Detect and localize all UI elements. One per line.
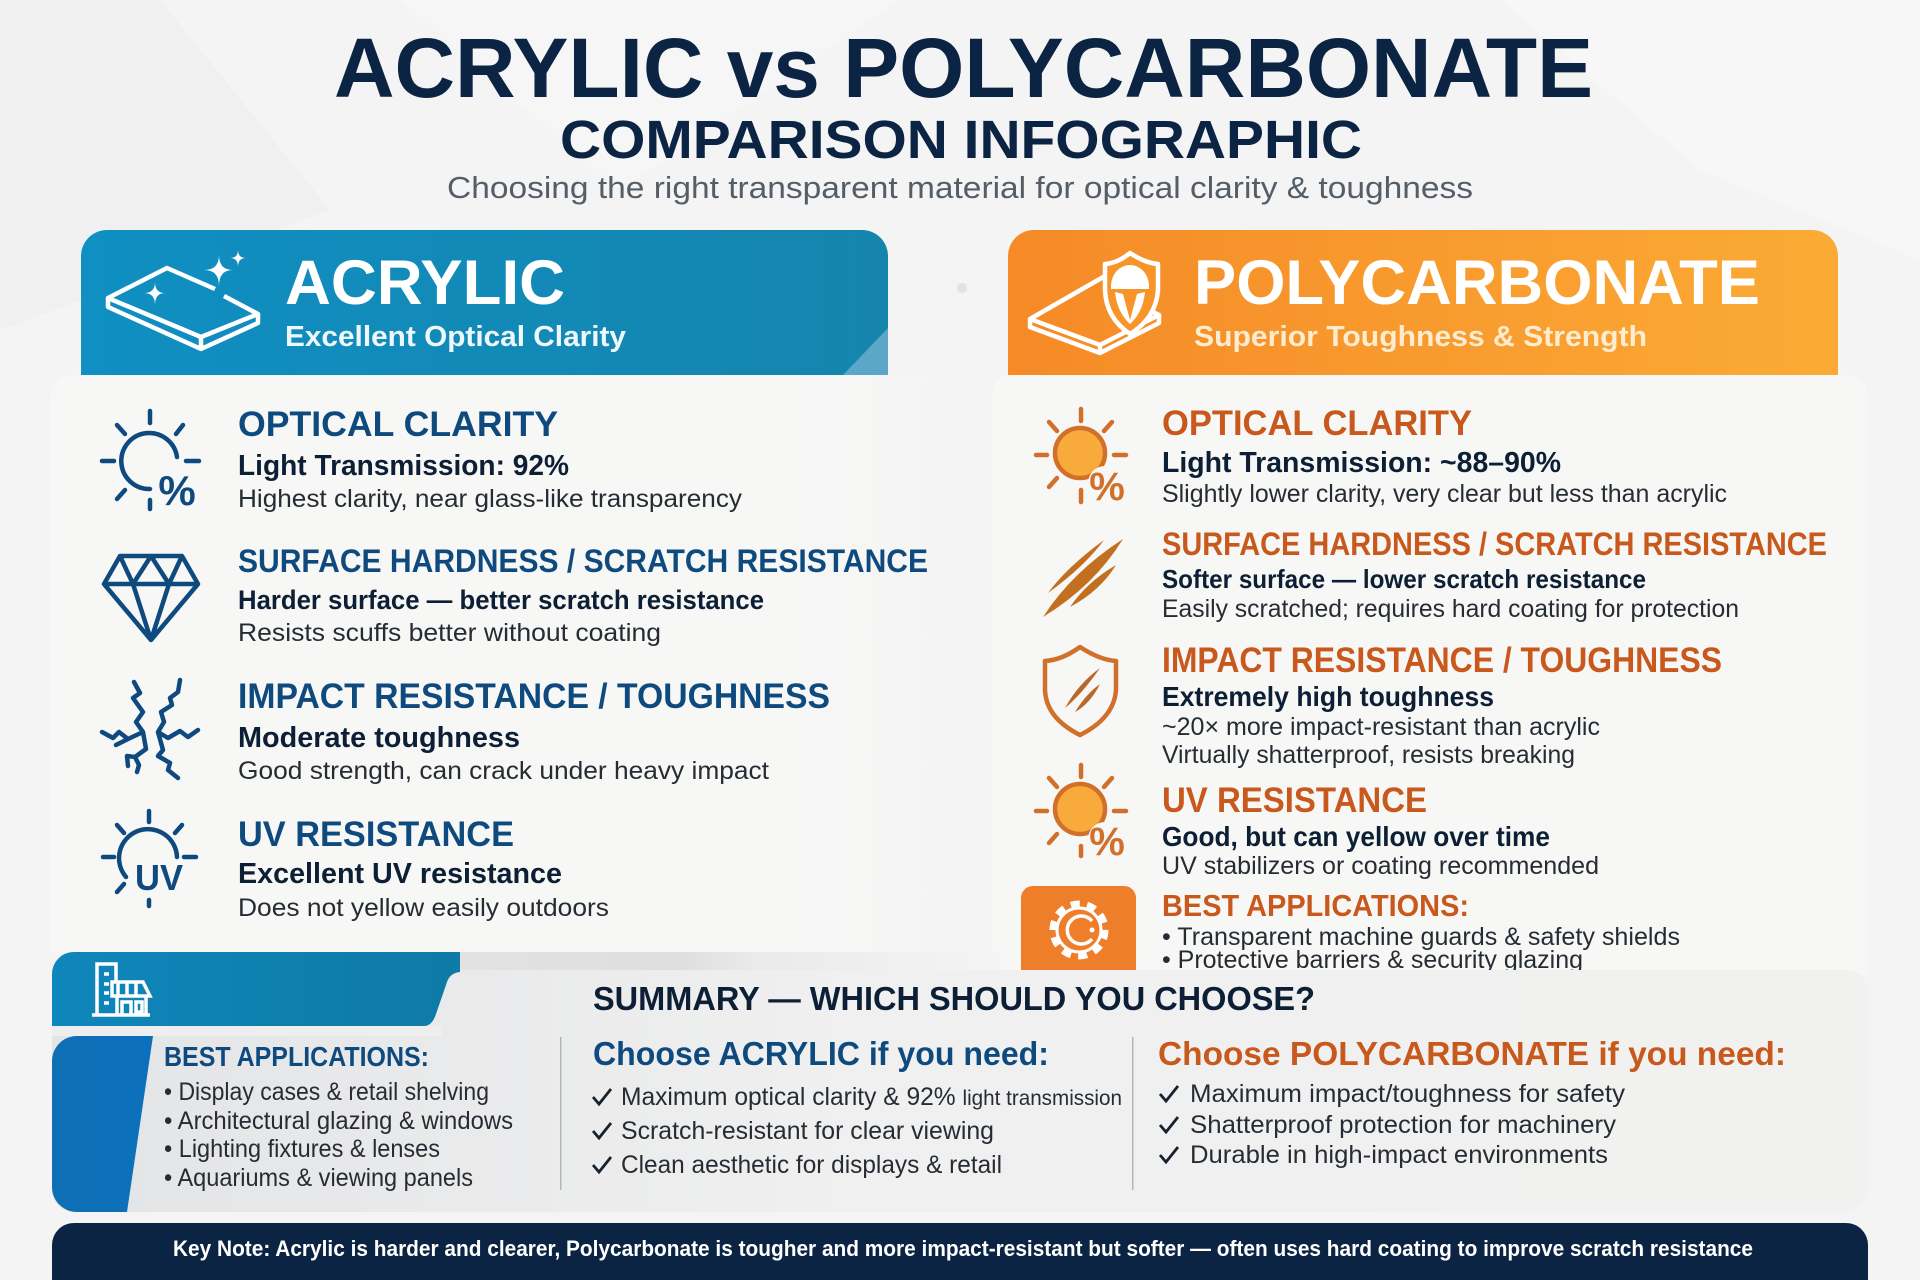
UV resistance text: UV RESISTANCE bbox=[238, 815, 514, 854]
icon: optical clarity sun bbox=[102, 411, 199, 514]
UV resistance text: Excellent UV resistance bbox=[238, 858, 562, 890]
optical clarity text: Highest clarity, near glass-like transparency bbox=[238, 485, 743, 513]
impact resistance text bbox=[238, 677, 830, 785]
choose acrylic column bbox=[593, 1035, 1122, 1179]
tagline: Choosing the right transparent material for optical clarity & toughness bbox=[447, 170, 1473, 205]
optical clarity text: OPTICAL CLARITY bbox=[1162, 404, 1472, 443]
icon: building bbox=[92, 964, 150, 1015]
impact resistance text: Extremely high toughness bbox=[1162, 681, 1494, 712]
choose acrylic column: Choose ACRYLIC if you need: bbox=[593, 1035, 1049, 1072]
impact resistance text: Good strength, can crack under heavy impact bbox=[238, 757, 769, 785]
icon: gear box bbox=[1021, 886, 1136, 975]
choose polycarbonate column: Maximum impact/toughness for safety bbox=[1190, 1080, 1626, 1108]
UV resistance text bbox=[238, 815, 609, 922]
best applications acrylic: • Aquariums & viewing panels bbox=[164, 1164, 473, 1192]
best applications polycarbonate bbox=[1162, 888, 1680, 974]
blue tab with building icon bbox=[52, 952, 460, 1026]
panel: summary bbox=[52, 952, 1868, 1212]
optical clarity text bbox=[1162, 404, 1727, 508]
surface hardness text bbox=[238, 543, 928, 647]
panel: polycarbonate properties bbox=[992, 375, 1868, 975]
best applications acrylic: • Display cases & retail shelving bbox=[164, 1078, 489, 1106]
icon: UV sun: UV bbox=[135, 857, 183, 898]
UV resistance text: UV stabilizers or coating recommended bbox=[1162, 852, 1599, 880]
impact resistance text: Virtually shatterproof, resists breaking bbox=[1162, 741, 1575, 769]
optical clarity text: Light Transmission: ~88–90% bbox=[1162, 447, 1561, 479]
icon: sheet with shield bbox=[1030, 253, 1159, 353]
surface hardness text bbox=[1162, 526, 1827, 623]
UV resistance text: Good, but can yellow over time bbox=[1162, 821, 1550, 852]
key note bar bbox=[52, 1223, 1868, 1280]
surface hardness text: Harder surface — better scratch resistance bbox=[238, 585, 764, 615]
acrylic heading: ACRYLIC bbox=[285, 248, 565, 318]
surface hardness text: SURFACE HARDNESS / SCRATCH RESISTANCE bbox=[238, 543, 928, 579]
optical clarity text bbox=[238, 405, 743, 513]
key note bar: Key Note: Acrylic is harder and clearer, Polycarbonate is tougher and more impact-resistant but softer — often uses hard coating to improve scratch resistance bbox=[173, 1236, 1753, 1261]
summary heading: SUMMARY — WHICH SHOULD YOU CHOOSE? bbox=[593, 980, 1315, 1017]
best applications polycarbonate: • Transparent machine guards & safety shields bbox=[1162, 923, 1680, 951]
optical clarity text: OPTICAL CLARITY bbox=[238, 405, 558, 444]
icon: optical clarity sun bbox=[1036, 409, 1126, 509]
UV resistance text bbox=[1162, 781, 1599, 880]
surface hardness text: SURFACE HARDNESS / SCRATCH RESISTANCE bbox=[1162, 526, 1827, 562]
optical clarity text: Slightly lower clarity, very clear but less than acrylic bbox=[1162, 480, 1727, 508]
impact resistance text: IMPACT RESISTANCE / TOUGHNESS bbox=[1162, 641, 1722, 680]
icon: UV sun: % bbox=[1089, 820, 1125, 864]
choose acrylic column: Clean aesthetic for displays & retail bbox=[621, 1151, 1002, 1179]
choose acrylic column: Maximum optical clarity & 92% light transmission bbox=[621, 1083, 1122, 1111]
panel: acrylic properties bbox=[51, 375, 960, 952]
impact resistance text bbox=[1162, 641, 1722, 769]
UV resistance text: Does not yellow easily outdoors bbox=[238, 894, 609, 922]
best applications polycarbonate: • Protective barriers & security glazing bbox=[1162, 946, 1583, 974]
title: ACRYLIC vs POLYCARBONATE bbox=[334, 21, 1593, 115]
best applications acrylic bbox=[164, 1041, 513, 1192]
surface hardness text: Softer surface — lower scratch resistance bbox=[1162, 564, 1646, 594]
blue side block bbox=[52, 1036, 153, 1212]
choose polycarbonate column: Durable in high-impact environments bbox=[1190, 1141, 1608, 1169]
optical clarity text: Light Transmission: 92% bbox=[238, 450, 569, 482]
panel: polycarbonate header bbox=[1008, 230, 1838, 375]
icon: scratches bbox=[1043, 539, 1123, 617]
best applications polycarbonate: BEST APPLICATIONS: bbox=[1162, 888, 1469, 923]
choose polycarbonate column bbox=[1158, 1035, 1786, 1169]
impact resistance text: Moderate toughness bbox=[238, 722, 520, 754]
icon: diamond bbox=[104, 556, 198, 640]
choose acrylic column: Scratch-resistant for clear viewing bbox=[621, 1117, 994, 1145]
best applications acrylic: • Lighting fixtures & lenses bbox=[164, 1135, 440, 1163]
icon: optical clarity sun: % bbox=[158, 467, 196, 514]
best applications acrylic: • Architectural glazing & windows bbox=[164, 1107, 513, 1135]
panel: acrylic header bbox=[81, 230, 888, 375]
best applications acrylic: BEST APPLICATIONS: bbox=[164, 1041, 429, 1072]
surface hardness text: Resists scuffs better without coating bbox=[238, 619, 661, 647]
acrylic subheading: Excellent Optical Clarity bbox=[285, 321, 626, 353]
icon: optical clarity sun: % bbox=[1089, 465, 1125, 509]
impact resistance text: IMPACT RESISTANCE / TOUGHNESS bbox=[238, 677, 830, 716]
surface hardness text: Easily scratched; requires hard coating for protection bbox=[1162, 595, 1739, 623]
icon: UV sun bbox=[1036, 765, 1126, 864]
icon: shield bbox=[1045, 647, 1116, 735]
subtitle: COMPARISON INFOGRAPHIC bbox=[560, 110, 1362, 170]
UV resistance text: UV RESISTANCE bbox=[1162, 781, 1427, 820]
icon: acrylic sheet bbox=[108, 250, 258, 349]
icon: UV sun bbox=[103, 811, 196, 906]
impact resistance text: ~20× more impact-resistant than acrylic bbox=[1162, 713, 1600, 741]
icon: cracks bbox=[102, 680, 198, 778]
choose polycarbonate column: Choose POLYCARBONATE if you need: bbox=[1158, 1035, 1786, 1072]
choose polycarbonate column: Shatterproof protection for machinery bbox=[1190, 1111, 1617, 1139]
polycarbonate heading: POLYCARBONATE bbox=[1194, 248, 1760, 318]
polycarbonate subheading: Superior Toughness & Strength bbox=[1194, 321, 1647, 353]
